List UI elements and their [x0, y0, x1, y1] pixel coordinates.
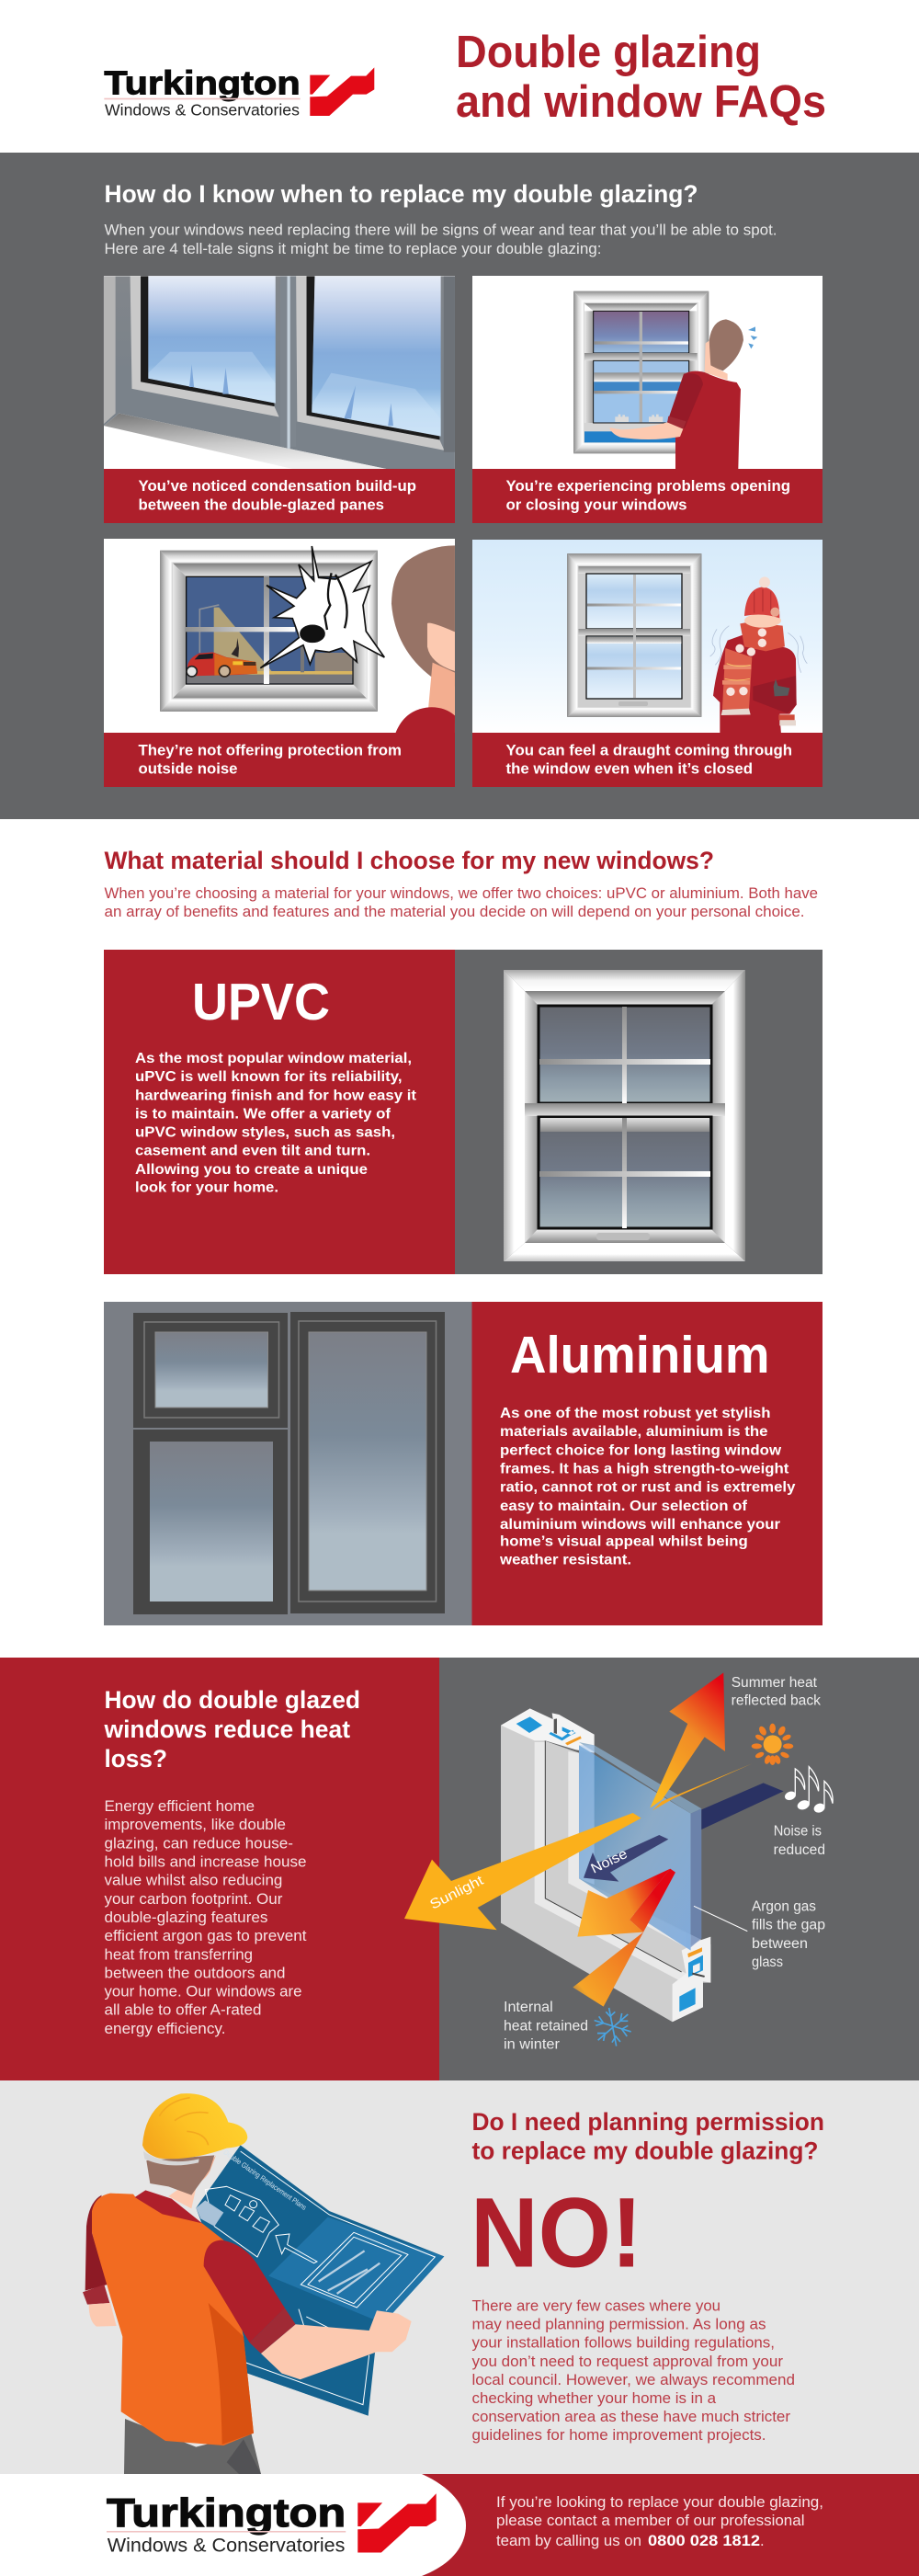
arrow: noise reduced	[584, 1835, 668, 1882]
panel: when to replace	[0, 153, 919, 819]
heading: material choice: What material should I choose for my new windows?	[105, 847, 714, 874]
intro text: when to replace	[105, 221, 777, 257]
heading: heat loss	[104, 1686, 360, 1772]
uPVC text block: is to maintain. We offer a variety of	[135, 1106, 391, 1122]
card: condensation	[104, 276, 455, 523]
intro text: material choice: When you’re choosing a material for your windows, we offer two choices: uPVC or aluminium. Both have	[105, 884, 818, 902]
label: internal heat: in winter	[504, 2037, 560, 2053]
arrow: summer heat reflected	[650, 1672, 725, 1808]
title	[456, 28, 826, 127]
uPVC text block: As the most popular window material,	[135, 1051, 412, 1066]
orange vest	[92, 2194, 254, 2445]
body text: heat loss: energy efficiency.	[105, 2021, 226, 2037]
body text: heat loss: hold bills and increase house	[105, 1854, 307, 1871]
aluminium text block: perfect choice for long lasting window	[500, 1442, 782, 1458]
label: summer heat	[732, 1675, 821, 1709]
label: argon gas: Argon gas	[752, 1899, 816, 1915]
illustration: person in scarf shivering	[710, 576, 807, 734]
illustration: misted window	[104, 276, 455, 469]
label: sunlight arrow: Sunlight	[427, 1872, 487, 1913]
caption bar: problems opening	[472, 469, 823, 523]
heading: planning permission	[472, 2108, 824, 2164]
caption bar: outside noise	[104, 733, 455, 787]
contact text: If you’re looking to replace your double glazing,	[496, 2494, 823, 2511]
body text: heat loss: glazing, can reduce house-	[105, 1836, 293, 1852]
arrow: internal heat head	[577, 1869, 670, 1937]
uPVC text block: uPVC window styles, such as sash,	[135, 1125, 395, 1141]
icon: snowflake	[595, 2008, 631, 2046]
aluminium text block	[472, 1302, 823, 1625]
collar	[135, 2190, 202, 2223]
body text: heat loss: your home. Our windows are	[105, 1984, 301, 2000]
caption bar: draught: the window even when it’s closed	[505, 761, 753, 778]
body text: heat loss: your carbon footprint. Our	[105, 1891, 283, 1908]
caption bar: problems opening: You’re experiencing problems opening	[505, 478, 790, 495]
arm and hand	[261, 2310, 412, 2379]
label: internal heat	[504, 2000, 588, 2053]
heading: planning permission: Do I need planning permission	[472, 2108, 824, 2136]
label: noise reduced	[774, 1824, 825, 1858]
caption bar: condensation: between the double-glazed panes	[138, 496, 384, 513]
panel: heat loss	[0, 1658, 919, 2080]
logo: footer: Turkington	[107, 2491, 346, 2536]
heading: planning permission: to replace my double glazing?	[472, 2137, 818, 2164]
label: noise reduced: reduced	[774, 1842, 825, 1858]
label: internal heat: Internal	[504, 2000, 553, 2015]
card: outside noise	[104, 539, 455, 787]
body text: heat loss: value whilst also reducing	[105, 1873, 282, 1889]
panel: uPVC	[104, 950, 823, 1274]
heading: when to replace: How do I know when to replace my double glazing?	[105, 180, 698, 208]
footer logo panel	[0, 2474, 466, 2576]
body text: heat loss: between the outdoors and	[105, 1965, 285, 1981]
aluminium text block: ratio, cannot rot or rust and is extremely	[500, 1480, 795, 1496]
aluminium text block: frames. It has a high strength-to-weight	[500, 1462, 789, 1477]
trousers	[124, 2419, 261, 2474]
pointer line: argon gas	[694, 1906, 747, 1932]
label: argon gas	[752, 1899, 825, 1970]
body text: planning permission: There are very few cases where you	[472, 2298, 720, 2315]
aluminium text block: materials available, aluminium is the	[500, 1424, 768, 1440]
label: noise reduced: Noise is	[774, 1824, 822, 1840]
caption bar: problems opening: or closing your windows	[505, 496, 687, 513]
arrow: internal heat stem	[573, 1869, 675, 2007]
uPVC text block: look for your home.	[135, 1180, 278, 1196]
big answer: NO: NO!	[471, 2177, 642, 2287]
label: internal heat: heat retained	[504, 2019, 588, 2035]
logo: footer: Windows & Conservatories	[108, 2536, 345, 2557]
title: Double glazing	[456, 28, 761, 77]
uPVC text block	[104, 950, 455, 1274]
label: summer heat: Summer heat	[732, 1675, 818, 1691]
uPVC text block: hardwearing finish and for how easy it	[135, 1088, 417, 1103]
body text: planning permission	[472, 2298, 795, 2444]
aluminium text block: As one of the most robust yet stylish	[500, 1406, 770, 1421]
label: argon gas: fills the gap	[752, 1918, 825, 1933]
heading: heat loss: loss?	[105, 1745, 167, 1772]
body text: heat loss: double-glazing features	[105, 1909, 268, 1926]
body text: heat loss: heat from transferring	[105, 1946, 253, 1963]
window frame profile	[501, 1708, 710, 2022]
caption bar: draught: You can feel a draught coming through	[505, 743, 792, 759]
left arm	[83, 2195, 117, 2327]
icon: sun	[752, 1724, 793, 1765]
aluminium text block: home’s visual appeal whilst being	[500, 1533, 748, 1550]
logo: header	[104, 64, 374, 119]
logo: header: Turkington	[104, 64, 301, 102]
neck and hair	[146, 2155, 216, 2208]
panel: aluminium	[104, 1302, 823, 1625]
body text: planning permission: guidelines for home improvement projects.	[472, 2427, 766, 2444]
illustration: man struggling with sash window	[573, 291, 757, 469]
blueprint	[196, 2145, 444, 2416]
contact text: 0800 028 1812	[648, 2533, 760, 2549]
title: and window FAQs	[456, 77, 826, 127]
intro text: when to replace: Here are 4 tell-tale signs it might be time to replace your double glazing:	[105, 240, 601, 257]
label: argon gas: between	[752, 1936, 808, 1952]
caption bar: condensation	[104, 469, 455, 523]
right sleeve	[204, 2240, 296, 2354]
label: summer heat: reflected back	[732, 1693, 821, 1709]
footer	[0, 2474, 919, 2576]
logo: footer	[107, 2491, 437, 2557]
body text: heat loss: all able to offer A-rated	[105, 2002, 261, 2019]
uPVC text block: Allowing you to create a unique	[135, 1162, 368, 1178]
body text: planning permission: you don’t need to request approval from your	[472, 2354, 784, 2370]
arrow: sunlight	[404, 1813, 641, 1930]
body text: planning permission: local council. However, we always recommend	[472, 2372, 795, 2388]
logo: header: Windows & Conservatories	[105, 100, 300, 119]
aluminium text block: aluminium windows will enhance your	[500, 1517, 780, 1533]
caption bar: outside noise: They’re not offering protection from	[138, 743, 402, 759]
uPVC text block: UPVC	[192, 973, 330, 1032]
hard hat	[142, 2093, 247, 2165]
contact text: .	[760, 2533, 765, 2549]
aluminium text block: easy to maintain. Our selection of	[500, 1499, 748, 1514]
body text: heat loss: efficient argon gas to prevent	[105, 1928, 307, 1944]
contact text: please contact a member of our professional	[496, 2513, 805, 2529]
illustration: uPVC sash window	[455, 950, 823, 1274]
arrow: noise band entering	[701, 1783, 784, 1829]
heading: heat loss: windows reduce heat	[104, 1715, 350, 1743]
illustration: builder reading plans	[83, 2093, 444, 2474]
contact text	[496, 2494, 823, 2549]
caption bar: draught	[472, 733, 823, 787]
label: noise arrow: Noise	[588, 1846, 630, 1877]
body text: planning permission: conservation area as these have much stricter	[472, 2409, 791, 2425]
diagram: double glazing cross-section	[404, 1658, 919, 2080]
illustration: window in cold weather	[567, 553, 702, 717]
body text: planning permission: may need planning permission. As long as	[472, 2317, 766, 2333]
heading: heat loss: How do double glazed	[105, 1686, 360, 1714]
panel: planning permission	[0, 2080, 919, 2474]
caption bar: condensation: You’ve noticed condensation build-up	[138, 478, 416, 495]
icon: music notes	[784, 1767, 833, 1814]
aluminium text block: weather resistant.	[499, 1552, 631, 1568]
intro text: material choice: an array of benefits and features and the material you decide on will depend on your personal choice.	[105, 903, 805, 920]
aluminium text block: Aluminium	[510, 1326, 770, 1385]
heat loss text block	[0, 1658, 439, 2080]
intro text: when to replace: When your windows need replacing there will be signs of wear and tear that you’ll be able to spot.	[105, 221, 777, 239]
illustration: aluminium windows	[104, 1302, 472, 1625]
body text: planning permission: your installation follows building regulations,	[472, 2335, 775, 2352]
contact text: team by calling us on	[496, 2533, 641, 2549]
body text: planning permission: checking whether your home is in a	[472, 2390, 717, 2407]
intro text: material choice	[105, 884, 818, 920]
body text: heat loss: improvements, like double	[105, 1817, 286, 1833]
glass panes	[579, 1742, 701, 1951]
body text: heat loss: Energy efficient home	[105, 1798, 255, 1815]
card: problems opening	[472, 276, 823, 523]
uPVC text block: casement and even tilt and turn.	[135, 1144, 370, 1159]
panel: material choice	[104, 847, 823, 1625]
card: draught	[472, 540, 823, 787]
body text: heat loss	[105, 1798, 307, 2037]
sunlight ray	[652, 1763, 752, 1810]
blueprint: Double Glazing Replacement Plans	[222, 2149, 308, 2212]
caption bar: outside noise: outside noise	[138, 761, 237, 778]
uPVC text block: uPVC is well known for its reliability,	[135, 1069, 403, 1085]
label: argon gas: glass	[752, 1955, 783, 1970]
illustration: noise bursting through window	[160, 545, 455, 735]
